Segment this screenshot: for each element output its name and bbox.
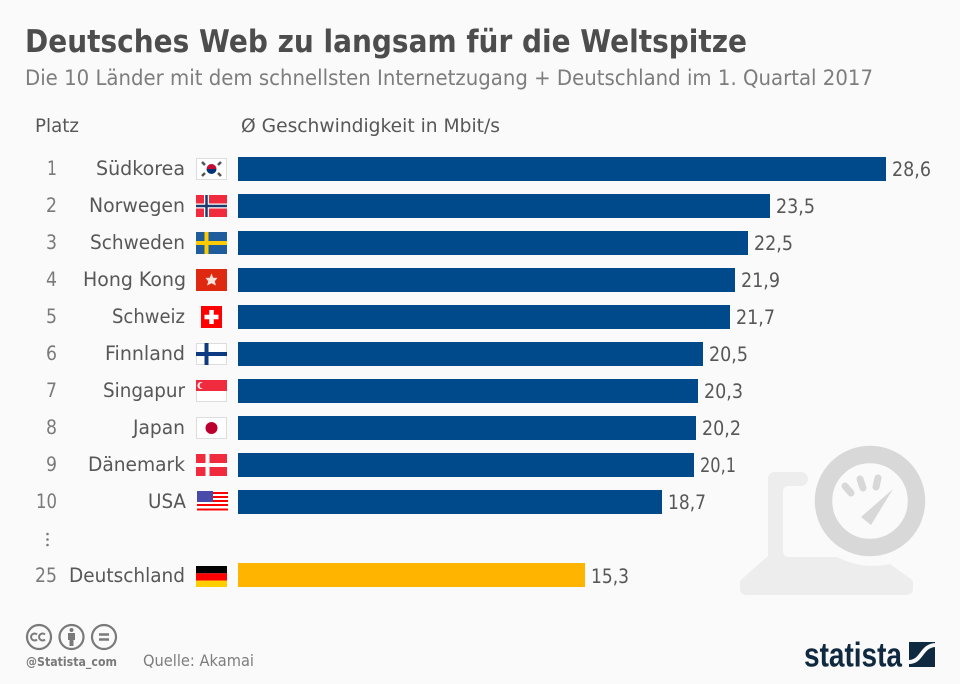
row: Schweiz: 5 (46, 305, 57, 328)
row: Singapur: Singapur (103, 379, 186, 402)
row: Hong Kong: Hong Kong (83, 268, 186, 291)
row: Singapur (46, 379, 743, 403)
column header: rank: Platz (35, 115, 79, 137)
icon: Creative Commons licence (27, 625, 116, 649)
flag: Switzerland (201, 306, 222, 328)
flag: Denmark (196, 454, 227, 476)
row: Japan: Japan (131, 416, 185, 439)
row: Singapur: 20,3 (704, 380, 743, 403)
row: Südkorea: Südkorea (96, 157, 185, 180)
row: Norwegen (46, 194, 815, 218)
social handle: @Statista_com (26, 654, 117, 670)
row: Finnland: Finnland (105, 342, 185, 365)
row: Hong Kong: 4 (46, 268, 57, 291)
row: Dänemark (46, 453, 736, 477)
row: Südkorea: 1 (47, 157, 57, 180)
icon: speedometer watermark (740, 454, 916, 595)
row: Deutschland: 15,3 (591, 565, 629, 588)
row: Schweiz: 21,7 (736, 306, 775, 329)
row: USA: 18,7 (668, 491, 706, 514)
row: Schweden: 3 (46, 231, 57, 254)
flag: Sweden (196, 232, 227, 254)
row: Schweiz (46, 305, 775, 329)
row: Schweden (46, 231, 793, 255)
column header: speed: Ø Geschwindigkeit in Mbit/s (241, 115, 500, 137)
row: Singapur: 7 (46, 379, 57, 402)
flag: South Korea (196, 158, 226, 180)
row: Südkorea: 28,6 (892, 158, 931, 181)
row: Norwegen: Norwegen (89, 194, 185, 217)
row: Deutschland: Deutschland (69, 564, 185, 587)
flag: Norway (196, 195, 227, 217)
flag: Hong Kong (196, 269, 227, 291)
title: Deutsches Web zu langsam für die Weltspitze (25, 24, 747, 60)
row: Dänemark: Dänemark (88, 453, 186, 476)
row: Finnland: 6 (46, 342, 57, 365)
row: Dänemark: 20,1 (700, 454, 736, 477)
row: Finnland (46, 342, 748, 366)
subtitle: Die 10 Länder mit dem schnellsten Internetzugang + Deutschland im 1. Quartal 2017 (25, 66, 873, 90)
flag: Germany (196, 566, 227, 587)
row: Deutschland (35, 563, 629, 588)
flag: Finland (196, 343, 227, 365)
row: Dänemark: 9 (46, 453, 57, 476)
row: Schweden: 22,5 (754, 232, 793, 255)
row: Deutschland: 25 (35, 564, 57, 587)
row: Schweiz: Schweiz (112, 305, 185, 328)
row: USA: 10 (36, 490, 57, 513)
source: Quelle: Akamai (143, 651, 254, 670)
row: Norwegen: 2 (46, 194, 57, 217)
row: Hong Kong: 21,9 (741, 269, 780, 292)
logo: Statista: statista (804, 636, 903, 674)
row: Norwegen: 23,5 (776, 195, 815, 218)
row: Japan (46, 416, 741, 440)
row: USA (36, 490, 706, 514)
flag: Singapore (196, 380, 227, 402)
row: Japan: 20,2 (702, 417, 741, 440)
ellipsis between ranks (46, 533, 49, 546)
flag: Japan (196, 418, 226, 438)
flag: USA (197, 491, 228, 512)
row: Südkorea (47, 157, 931, 181)
row: Finnland: 20,5 (709, 343, 748, 366)
row: USA: USA (148, 490, 187, 513)
row: Japan: 8 (46, 416, 57, 439)
row: Schweden: Schweden (90, 231, 185, 254)
row: Hong Kong (46, 268, 780, 292)
